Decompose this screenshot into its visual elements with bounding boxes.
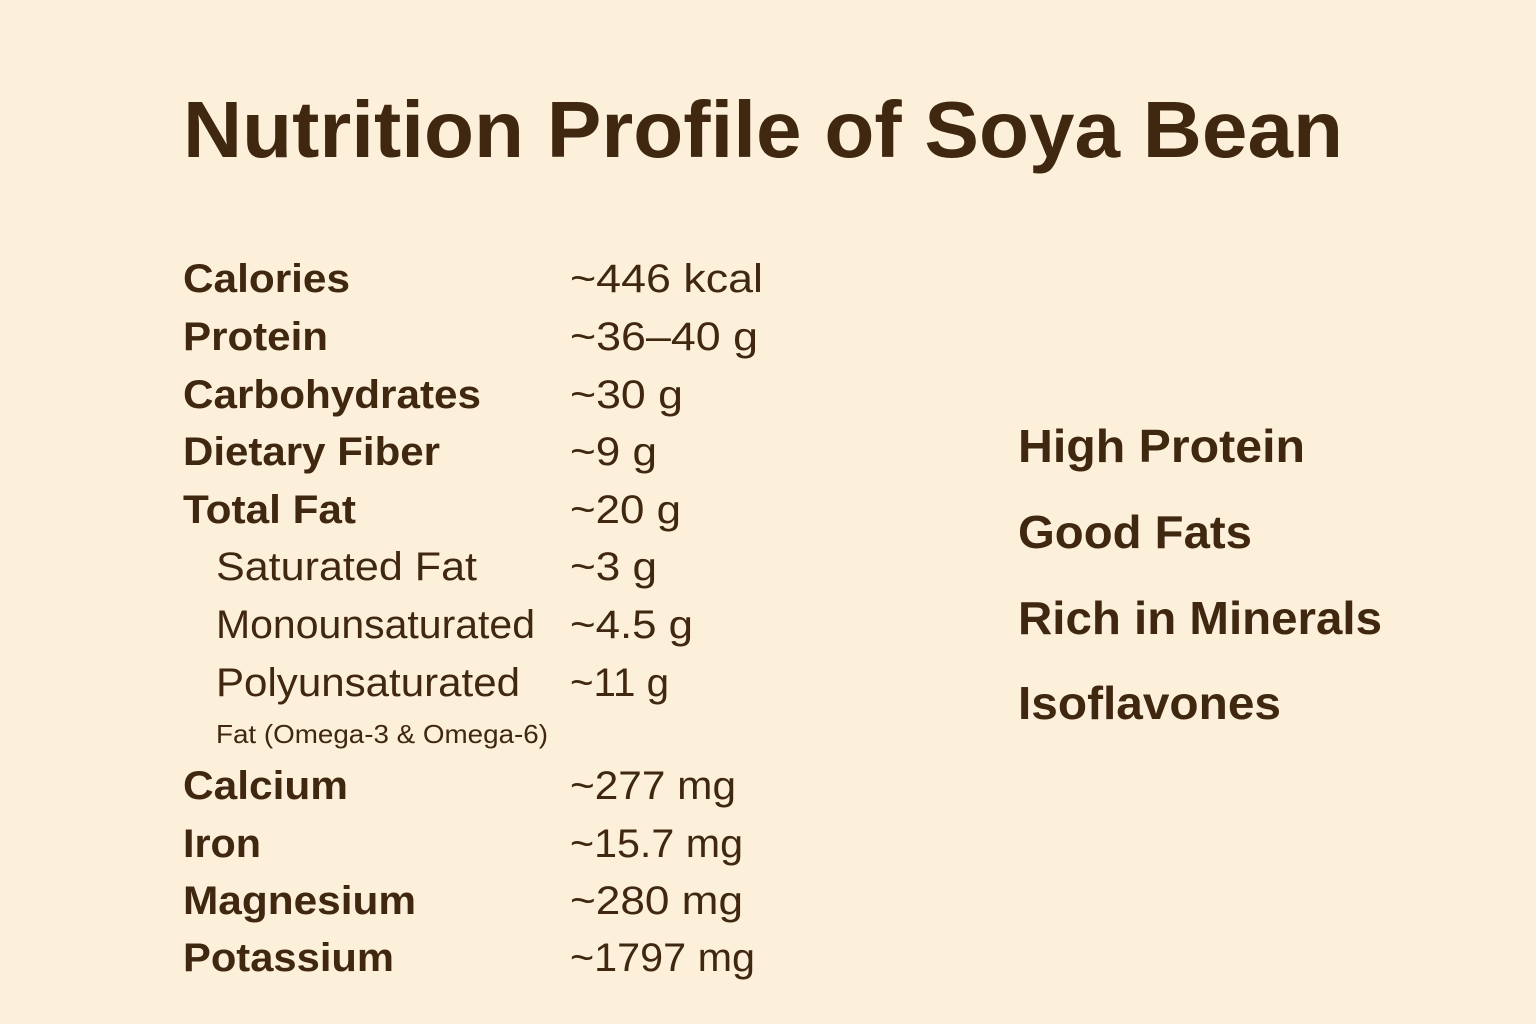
row: carbohydrates: ~30 g	[570, 373, 683, 417]
row: protein	[183, 315, 758, 359]
row: calcium: Calcium	[183, 764, 348, 808]
row: monounsaturated	[216, 603, 693, 647]
nutrition table	[183, 257, 763, 980]
row: polyunsaturated	[216, 661, 669, 749]
row: monounsaturated: Monounsaturated	[216, 603, 535, 647]
row: polyunsaturated: ~11 g	[570, 661, 669, 705]
highlight: good fats: Good Fats	[1018, 506, 1252, 558]
row: saturated fat: Saturated Fat	[216, 545, 477, 589]
title: Nutrition Profile of Soya Bean	[183, 85, 1343, 174]
row: dietary fiber: ~9 g	[570, 430, 657, 474]
row: dietary fiber: Dietary Fiber	[183, 430, 440, 474]
row: calories: Calories	[183, 257, 350, 301]
row: carbohydrates: Carbohydrates	[183, 373, 481, 417]
row: calcium	[183, 764, 736, 808]
row: magnesium: Magnesium	[183, 879, 416, 923]
row: polyunsaturated: Polyunsaturated	[216, 661, 520, 705]
row: protein: Protein	[183, 315, 328, 359]
row: iron	[183, 822, 743, 866]
row: carbohydrates	[183, 373, 683, 417]
row: iron: Iron	[183, 822, 261, 866]
row: calories	[183, 257, 763, 301]
row: polyunsaturated: Fat (Omega-3 & Omega-6)	[216, 719, 548, 749]
highlight: high protein: High Protein	[1018, 420, 1305, 472]
highlight: isoflavones: Isoflavones	[1018, 677, 1281, 729]
row: potassium	[183, 936, 755, 980]
row: magnesium: ~280 mg	[570, 879, 743, 923]
row: saturated fat	[216, 545, 657, 589]
row: calories: ~446 kcal	[570, 257, 763, 301]
row: total fat: Total Fat	[183, 488, 356, 532]
row: potassium: ~1797 mg	[570, 936, 755, 980]
row: calcium: ~277 mg	[570, 764, 736, 808]
row: dietary fiber	[183, 430, 657, 474]
row: total fat: ~20 g	[570, 488, 681, 532]
highlight: rich in minerals: Rich in Minerals	[1018, 592, 1382, 644]
row: total fat	[183, 488, 681, 532]
highlights list	[1018, 420, 1382, 729]
row: saturated fat: ~3 g	[570, 545, 657, 589]
row: potassium: Potassium	[183, 936, 394, 980]
row: monounsaturated: ~4.5 g	[570, 603, 693, 647]
row: magnesium	[183, 879, 743, 923]
row: protein: ~36–40 g	[570, 315, 758, 359]
row: iron: ~15.7 mg	[570, 822, 743, 866]
